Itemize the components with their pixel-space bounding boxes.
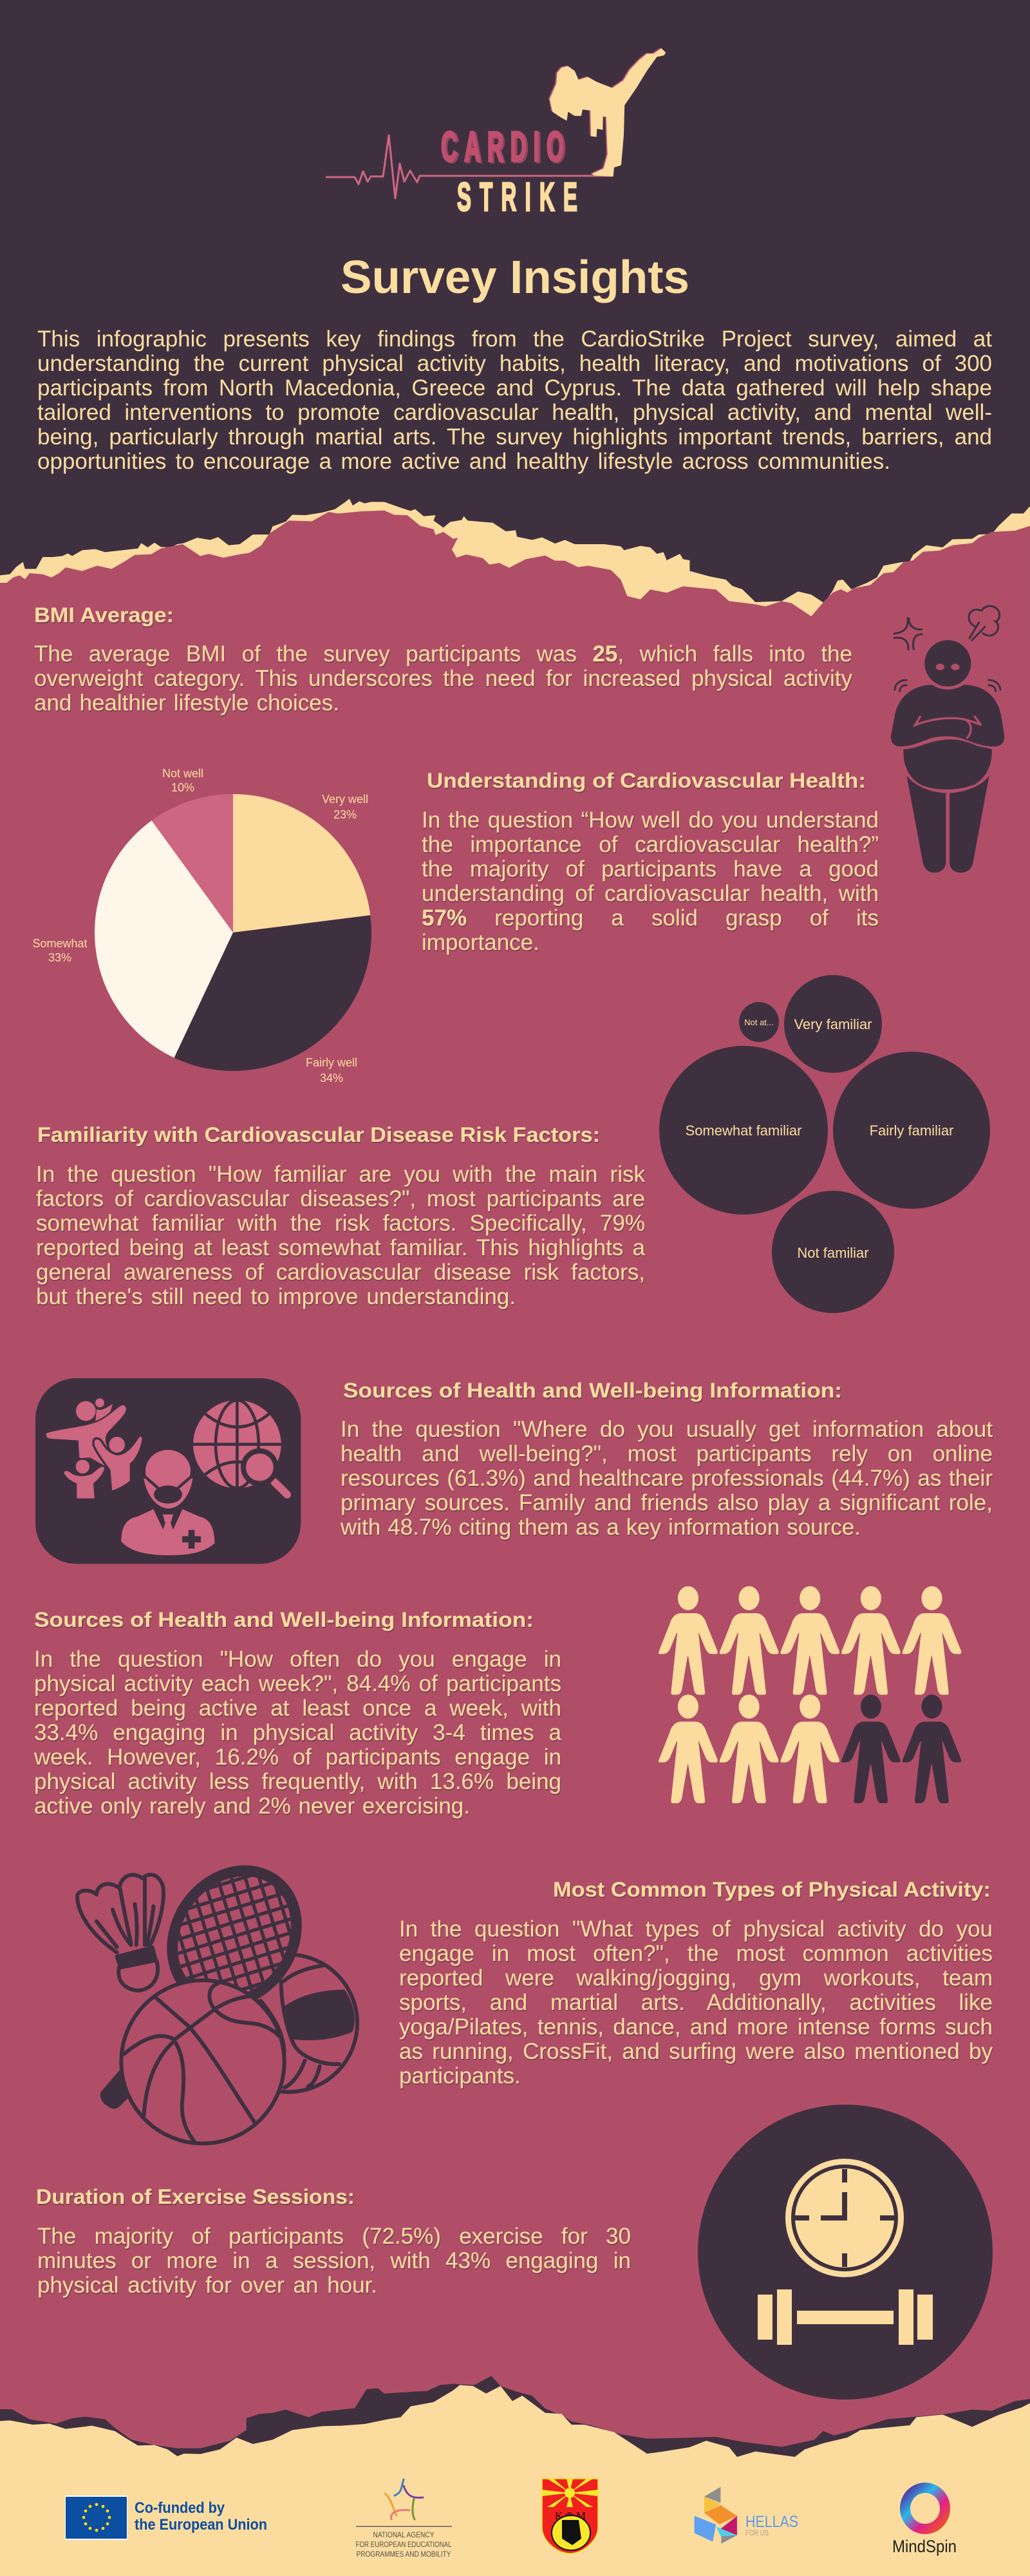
sources paragraph: primary sources. Family and friends also play a significant role, [341, 1490, 993, 1515]
logo: national agency: PROGRAMMES AND MOBILITY [357, 2550, 451, 2559]
sources paragraph: resources (61.3%) and healthcare professionals (44.7%) as their [341, 1466, 993, 1491]
logo: national agency [355, 2479, 452, 2559]
activity types paragraph: sports, and martial arts. Additionally, activities like [399, 1990, 993, 2015]
familiarity paragraph: but there's still need to improve understanding. [36, 1284, 516, 1309]
activity types paragraph: yoga/Pilates, tennis, dance, and more intense forms such [399, 2014, 993, 2040]
heading: familiarity with risk factors: Familiarity with Cardiovascular Disease Risk Factors: [37, 1123, 600, 1146]
icon: clock and dumbbell in a circle [698, 2105, 993, 2400]
logo: MindSpin: MindSpin [892, 2537, 957, 2556]
understanding paragraph: the majority of participants have a good [422, 857, 879, 882]
bubble: fairly familiar: Fairly familiar [870, 1122, 953, 1139]
bubble: not familiar: Not familiar [797, 1245, 869, 1261]
activity types paragraph [399, 1917, 993, 2090]
activity frequency paragraph: reported being active at least once a week, with [34, 1696, 561, 1721]
intro paragraph: participants from North Macedonia, Greece and Cyprus. The data gathered will help shape [37, 375, 992, 401]
understanding paragraph: the importance of cardiovascular health?” [422, 832, 879, 857]
logo: Hellas for us: FOR US [745, 2528, 769, 2537]
BMI paragraph [34, 641, 853, 717]
racket [100, 1839, 329, 2108]
activity types paragraph: reported were walking/jogging, gym workouts, team [399, 1965, 993, 1991]
pie label: not well: Not well [162, 767, 203, 780]
activity frequency paragraph: physical activity each week?", 84.4% of participants [34, 1671, 561, 1696]
logo kicker shadow [548, 48, 664, 176]
heading: BMI Average: BMI Average: [34, 603, 174, 627]
activity types paragraph: engage in most often?", the most common activities [399, 1941, 993, 1966]
duration paragraph: physical activity for over an hour. [37, 2273, 377, 2298]
pie label: somewhat: 33% [48, 951, 71, 964]
logo heartbeat line [326, 135, 613, 198]
heading: understanding of cardiovascular health: Understanding of Cardiovascular Health: [427, 769, 866, 792]
pie label: very well: 23% [333, 808, 357, 821]
slice: not well 10% [152, 794, 233, 933]
logo: national agency: NATIONAL AGENCY [373, 2530, 434, 2539]
pie label: not well: 10% [171, 781, 194, 794]
bubble: very familiar: Very familiar [794, 1016, 872, 1032]
dumbbell [758, 2289, 933, 2345]
activity frequency paragraph: active only rarely and 2% never exercising. [34, 1794, 470, 1819]
sources paragraph [341, 1417, 993, 1541]
torn paper edge: bottom [0, 2376, 1030, 2576]
bubble chart: familiarity with risk factors [659, 975, 990, 1313]
torn paper edge: top [0, 498, 1030, 657]
understanding paragraph: understanding of cardiovascular health, with [422, 881, 879, 906]
clock [785, 2159, 904, 2277]
BMI paragraph: and healthier lifestyle choices. [34, 690, 339, 715]
understanding paragraph [422, 808, 879, 956]
title: Survey Insights [341, 252, 689, 303]
logo: EU co-funded: Co-funded by [135, 2499, 225, 2517]
familiarity paragraph: somewhat familiar with the risk factors. Specifically, 79% [36, 1211, 645, 1236]
familiarity paragraph: reported being at least somewhat familiar. This highlights a [36, 1235, 645, 1260]
BMI paragraph: overweight category. This underscores the need for increased physical activity [34, 666, 852, 691]
bubble: not at all [739, 1002, 779, 1042]
logo word CARDIO: CARDIO [443, 124, 573, 172]
understanding paragraph: importance. [422, 930, 539, 955]
icon: sports equipment [77, 1839, 357, 2143]
bubble: very familiar [784, 975, 882, 1073]
intro paragraph: tailored interventions to promote cardiovascular health, physical activity, and mental well- [37, 400, 992, 425]
sources paragraph: with 48.7% citing them as a key information source. [341, 1515, 861, 1540]
logo kicker silhouette [550, 48, 666, 176]
slice: fairly well 34% [174, 915, 371, 1071]
logo: Hellas for us: HELLAS [745, 2513, 798, 2531]
logo: national agency: FOR EUROPEAN EDUCATIONAL [355, 2540, 452, 2549]
icon: overweight angry figure [891, 606, 1004, 873]
heading: sources of health information: Sources of Health and Well-being Information: [343, 1379, 842, 1402]
pictogram: 8 of 10 active people [659, 1586, 961, 1803]
dark header background [0, 0, 1030, 631]
intro paragraph: understanding the current physical activity habits, health literacy, and motivations of 300 [37, 351, 992, 376]
logo: EU co-funded [65, 2496, 267, 2540]
pie label: somewhat: Somewhat [32, 937, 88, 950]
icon panel: information sources [35, 1378, 301, 1564]
intro paragraph: opportunities to encourage a more active and healthy lifestyle across communities. [37, 449, 890, 474]
bubble: somewhat familiar [659, 1046, 828, 1215]
duration paragraph: minutes or more in a session, with 43% engaging in [37, 2248, 631, 2273]
duration paragraph [37, 2224, 631, 2299]
sources paragraph: health and well-being?", most participants rely on online [341, 1441, 993, 1466]
activity types paragraph: In the question "What types of physical activity do you [399, 1917, 993, 1942]
activity frequency paragraph: week. However, 16.2% of participants engage in [34, 1745, 561, 1770]
heading: duration of sessions: Duration of Exercise Sessions: [36, 2185, 355, 2208]
intro paragraph: This infographic presents key findings from the CardioStrike Project survey, aimed at [37, 327, 992, 352]
logo: MindSpin [892, 2488, 957, 2556]
activity types paragraph: as running, CrossFit, and surfing were also mentioned by [399, 2039, 993, 2064]
BMI paragraph: The average BMI of the survey participants was 25, which falls into the [34, 641, 852, 667]
bubble: somewhat familiar: Somewhat familiar [686, 1122, 801, 1139]
bubble: fairly familiar [833, 1052, 990, 1209]
logo word CARDIO: CARDIO [441, 123, 571, 171]
understanding paragraph: In the question “How well do you understand [422, 808, 879, 833]
activity frequency paragraph: physical activity less frequently, with 13.6% being [34, 1769, 561, 1794]
pie label: fairly well: Fairly well [306, 1056, 357, 1069]
pie label: fairly well: 34% [320, 1072, 343, 1084]
familiarity paragraph: In the question "How familiar are you with the main risk [36, 1162, 645, 1187]
intro paragraph: being, particularly through martial arts. The survey highlights important trends, barriers, and [37, 424, 992, 450]
activity frequency paragraph: 33.4% engaging in physical activity 3-4 times a [34, 1720, 561, 1745]
logo word STRIKE: STRIKE [457, 175, 586, 220]
logo: Hellas for us [695, 2487, 798, 2544]
heading: physical activity frequency: Sources of Health and Well-being Information: [34, 1608, 534, 1631]
familiarity paragraph: factors of cardiovascular diseases?", most participants are [36, 1186, 645, 1211]
duration paragraph: The majority of participants (72.5%) exercise for 30 [37, 2224, 631, 2249]
pie label: very well: Very well [322, 793, 368, 806]
activity frequency paragraph [34, 1647, 563, 1820]
familiarity paragraph [36, 1162, 646, 1311]
activity types paragraph: participants. [399, 2063, 521, 2088]
logo: CardioStrike [326, 48, 666, 220]
heading: most common activity types: Most Common Types of Physical Activity: [553, 1878, 991, 1901]
activity frequency paragraph: In the question "How often do you engage in [34, 1647, 561, 1672]
slice: somewhat 33% [95, 820, 233, 1057]
logo: karate federation shield: Κ Φ Μ [555, 2510, 586, 2522]
basketball [121, 1980, 285, 2143]
sources paragraph: In the question "Where do you usually get information about [341, 1417, 993, 1442]
bubble: not familiar [772, 1191, 894, 1313]
logo: EU co-funded: the European Union [135, 2516, 267, 2533]
familiarity paragraph: general awareness of cardiovascular disease risk factors, [36, 1260, 645, 1285]
volleyball [220, 1955, 357, 2092]
slice: very well 23% [233, 794, 370, 933]
bubble: not at all: Not at... [744, 1018, 774, 1027]
pie chart: understanding of cardiovascular health [32, 767, 371, 1084]
shuttlecock [77, 1875, 164, 1991]
understanding paragraph: 57% reporting a solid grasp of its [422, 905, 879, 931]
intro paragraph [37, 327, 992, 474]
logo: karate federation shield [542, 2479, 598, 2553]
